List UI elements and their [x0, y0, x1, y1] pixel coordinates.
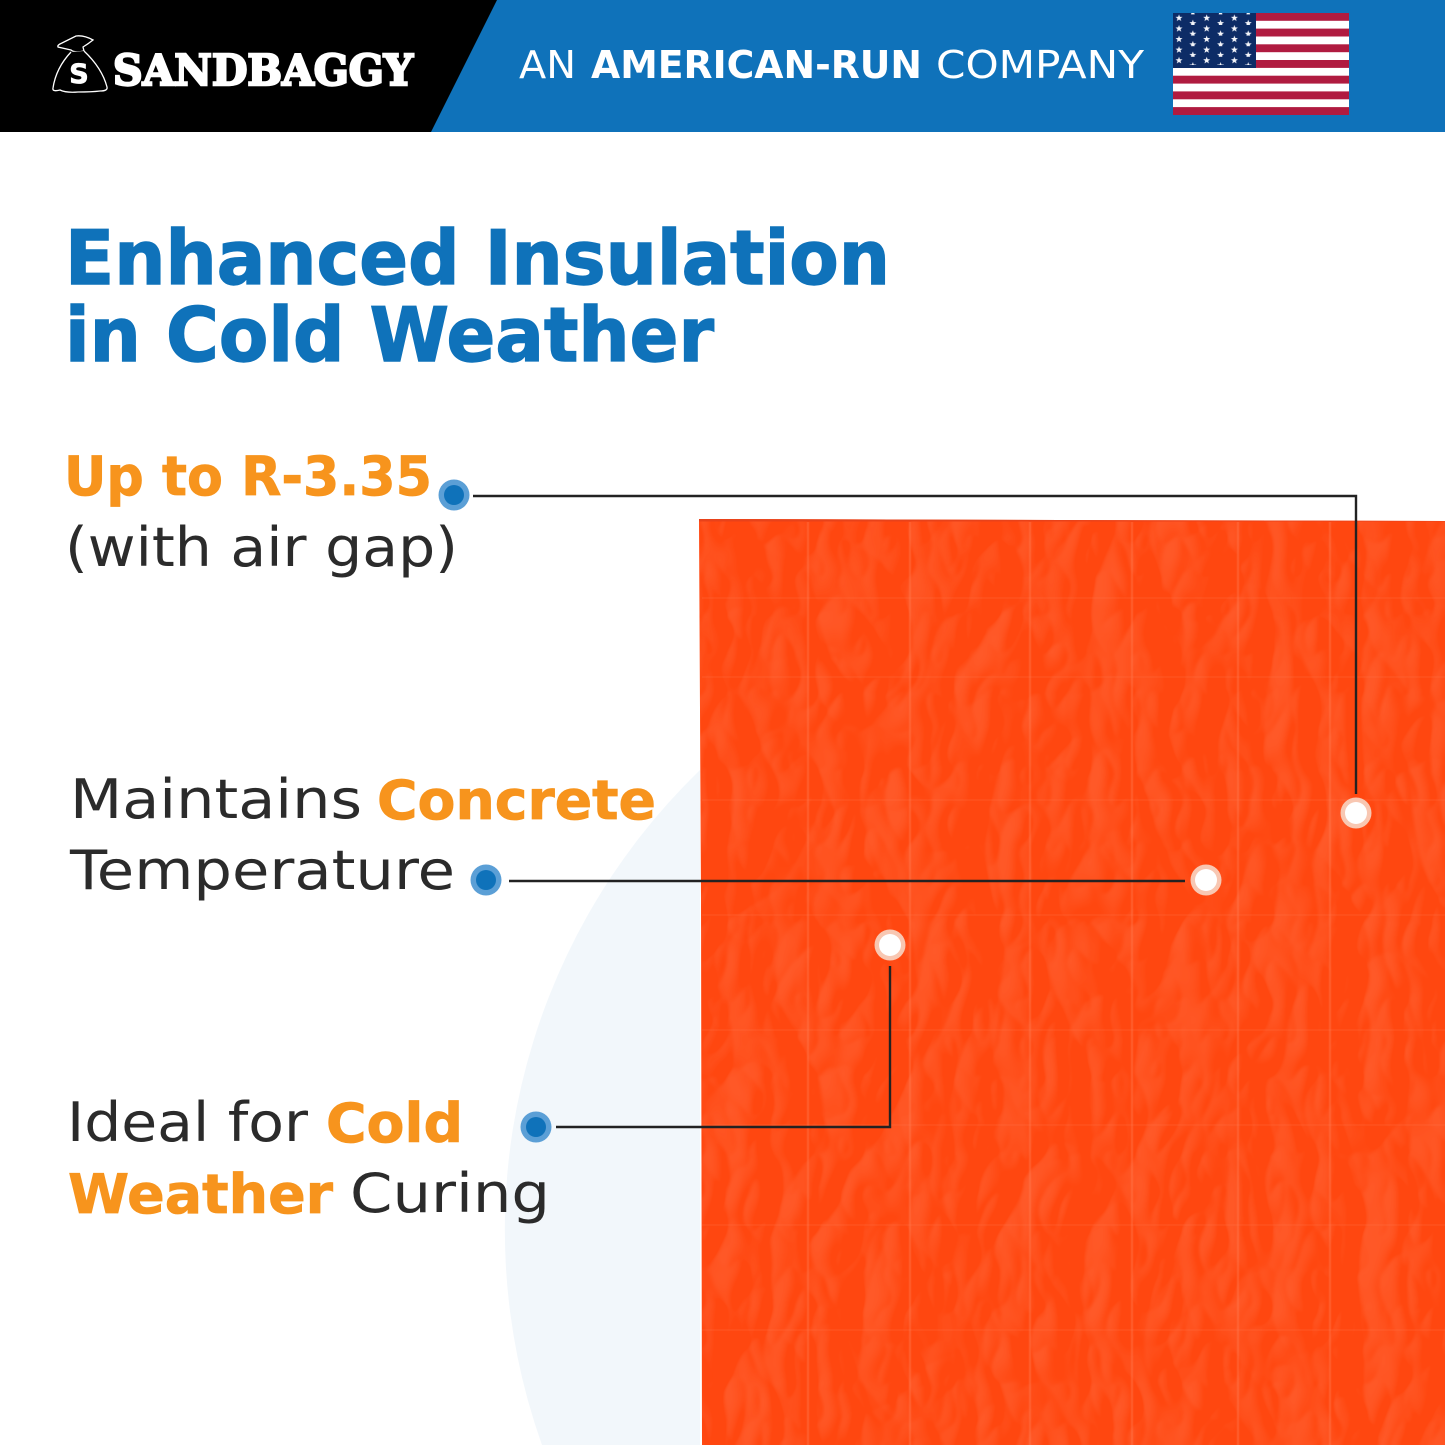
callout: cold weather curing text: Ideal for [67, 1091, 309, 1154]
callout: concrete temperature text: Concrete [377, 769, 656, 832]
marker: white dot 2 [1190, 864, 1222, 896]
callout: R-value text: (with air gap) [65, 516, 458, 579]
callout: concrete temperature text: Maintains [70, 768, 362, 831]
marker: blue dot 3 [520, 1112, 552, 1142]
leader line 1 [473, 496, 1356, 794]
icon: sandbag logo [53, 36, 107, 92]
marker: blue dot 2 [470, 864, 502, 896]
logo wordmark: SANDBAGGY [113, 46, 414, 95]
leader line 2 [509, 880, 1185, 882]
header bar [0, 0, 1445, 132]
icon: sandbag logo: S [69, 59, 89, 90]
tagline [519, 43, 1145, 87]
callout: R-value text [64, 445, 458, 579]
orange tarp photo [699, 519, 1445, 1445]
title [65, 214, 890, 379]
tagline: AN [519, 43, 576, 87]
callout: concrete temperature text [69, 768, 656, 902]
marker: white dot 3 [874, 930, 906, 960]
icon: american flag [1173, 13, 1349, 115]
tagline: AMERICAN-RUN [591, 43, 922, 87]
marker: blue dot 1 [438, 480, 470, 510]
callout: cold weather curing text: Curing [350, 1162, 550, 1225]
blue banner [0, 0, 1445, 132]
title: in Cold Weather [65, 291, 714, 379]
callout: concrete temperature text: Temperature [69, 839, 455, 902]
callout: cold weather curing text: Weather [68, 1163, 333, 1226]
callout: cold weather curing text [67, 1091, 550, 1226]
tagline: COMPANY [936, 43, 1145, 87]
marker: white dot 1 [1340, 798, 1372, 828]
black logo panel [0, 0, 497, 132]
background circle [505, 770, 700, 1445]
leader line 3 [556, 966, 890, 1127]
callout: cold weather curing text: Cold [326, 1092, 463, 1155]
title: Enhanced Insulation [65, 214, 890, 302]
callout: R-value text: Up to R-3.35 [64, 445, 432, 508]
